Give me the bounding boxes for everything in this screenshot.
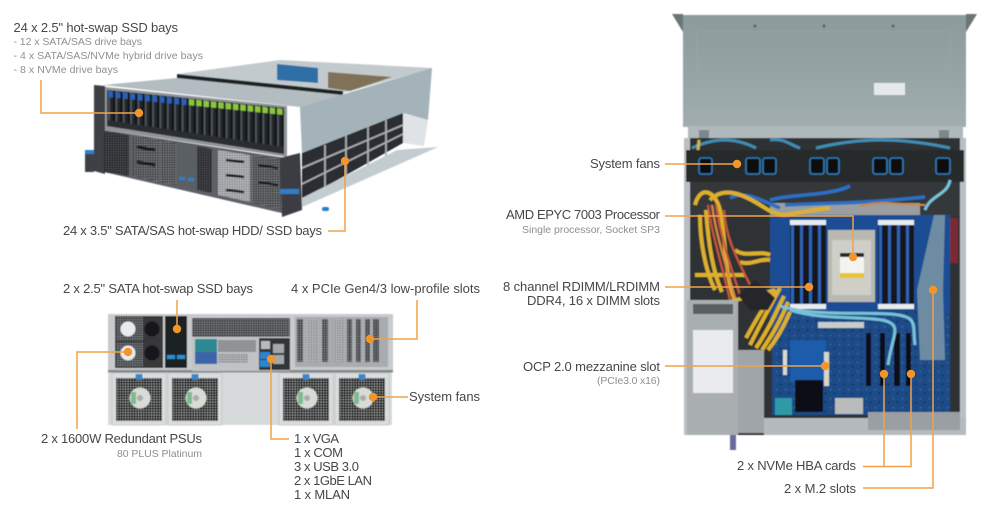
light blue HBA cables	[780, 180, 950, 365]
heading: 24 x 2.5 inch SSD bays: - 12 x SATA/SAS drive bays	[14, 36, 142, 48]
CPU socket	[828, 230, 875, 302]
label: rear SSD bays: 2 x 2.5" SATA hot-swap SSD bays	[63, 281, 254, 296]
label: M.2 slots: 2 x M.2 slots	[784, 481, 856, 496]
leader: HDD bays	[328, 157, 349, 231]
label: rear system fans: System fans	[409, 389, 480, 404]
leader: system fans	[665, 160, 741, 168]
leader: memory	[665, 283, 813, 291]
yellow power cables	[695, 192, 830, 350]
leader: processor	[665, 216, 857, 261]
label: PCIe slots: 4 x PCIe Gen4/3 low-profile slots	[291, 281, 480, 296]
label: NVMe HBA cards: 2 x NVMe HBA cards	[737, 458, 856, 473]
rear I/O panel	[192, 338, 290, 371]
leader: rear SSD bays	[173, 300, 181, 333]
label: OCP slot	[523, 359, 660, 387]
DIMM slots	[790, 220, 914, 309]
label: processor: Single processor, Socket SP3	[522, 224, 660, 236]
label: redundant PSUs: 80 PLUS Platinum	[117, 448, 202, 460]
leader: PSUs	[77, 348, 132, 429]
label: rear I/O list	[294, 431, 372, 502]
image: rear server view	[108, 314, 393, 425]
leader: OCP slot	[665, 362, 829, 370]
heading: 24 x 2.5 inch SSD bays: - 8 x NVMe drive bays	[14, 64, 118, 76]
label: rear I/O list: 1 x COM	[294, 445, 343, 460]
side wiring	[950, 218, 958, 263]
label: system fans: System fans	[590, 156, 660, 171]
leader: rear system fans	[369, 393, 408, 401]
rear fans	[112, 373, 389, 425]
leader: rear I/O	[267, 355, 289, 439]
PSU bays	[115, 316, 163, 368]
M.2 cable bundle	[917, 215, 945, 360]
label: OCP slot: (PCIe3.0 x16)	[597, 375, 660, 387]
rear bracket	[688, 126, 963, 138]
label: processor	[506, 207, 661, 236]
PCIe slots	[295, 317, 388, 367]
power supply	[687, 300, 764, 450]
label: rear I/O list: 3 x USB 3.0	[294, 459, 359, 474]
chassis interior base	[684, 138, 966, 435]
label: memory	[503, 279, 660, 308]
heading: 24 x 2.5 inch SSD bays: 24 x 2.5" hot-swap SSD bays	[14, 20, 178, 35]
blue cables	[730, 186, 925, 208]
fan bar	[686, 150, 964, 182]
cables above fan bar	[692, 140, 950, 150]
label: redundant PSUs: 2 x 1600W Redundant PSUs	[41, 431, 202, 446]
label: rear I/O list: 1 x MLAN	[294, 487, 350, 502]
leader: NVMe HBA cards	[863, 370, 915, 466]
label: memory: 8 channel RDIMM/LRDIMM	[503, 279, 660, 294]
heading: 24 x 2.5 inch SSD bays	[14, 20, 203, 76]
label: 24 x 3.5 inch HDD bays: 24 x 3.5" SATA/SAS hot-swap HDD/ SSD bays	[63, 223, 322, 238]
top cover	[672, 14, 977, 127]
label: redundant PSUs	[41, 431, 202, 460]
leader: PCIe slots	[366, 300, 417, 343]
leader: SSD bays	[41, 80, 143, 117]
label: processor: AMD EPYC 7003 Processor	[506, 207, 661, 222]
image: top-down server interior	[672, 14, 977, 450]
cable clamp	[738, 280, 775, 310]
motherboard	[770, 215, 950, 415]
bottom rear rail	[764, 412, 966, 435]
leader: M.2 slots	[863, 286, 937, 488]
rear SSD bays	[165, 316, 187, 368]
red and orange wire bundle	[708, 205, 750, 300]
image: front isometric server	[85, 60, 438, 217]
label: OCP slot: OCP 2.0 mezzanine slot	[523, 359, 660, 374]
label: rear I/O list: 2 x 1GbE LAN	[294, 473, 372, 488]
label: rear I/O list: 1 x VGA	[294, 431, 339, 446]
heading: 24 x 2.5 inch SSD bays: - 4 x SATA/SAS/NVMe hybrid drive bays	[14, 50, 203, 62]
label: memory: DDR4, 16 x DIMM slots	[527, 293, 660, 308]
